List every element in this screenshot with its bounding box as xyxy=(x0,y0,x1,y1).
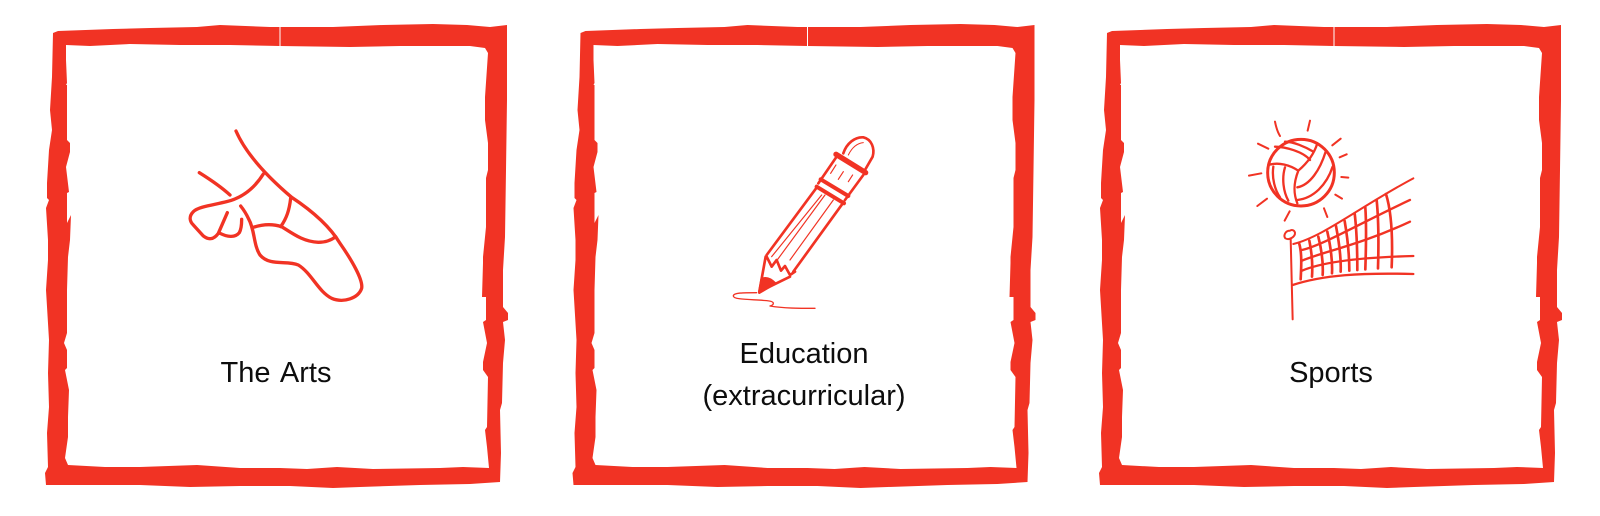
label: Sports: Sports xyxy=(1289,357,1373,389)
label: Education (extracurricular): (extracurricular) xyxy=(702,380,906,412)
frame: Sports xyxy=(1099,24,1562,488)
icon: ballet shoe xyxy=(190,131,362,300)
icon: volleyball and net xyxy=(1249,121,1413,319)
panel: Sports xyxy=(1099,24,1562,488)
label: Education (extracurricular): Education xyxy=(740,338,868,370)
panel: Education xyxy=(572,24,1036,488)
frame: The Arts xyxy=(45,24,508,488)
frame: Education xyxy=(572,24,1036,488)
label: The Arts: The Arts xyxy=(220,357,332,389)
panel: The Arts xyxy=(45,24,508,488)
icon: pencil xyxy=(733,137,873,308)
